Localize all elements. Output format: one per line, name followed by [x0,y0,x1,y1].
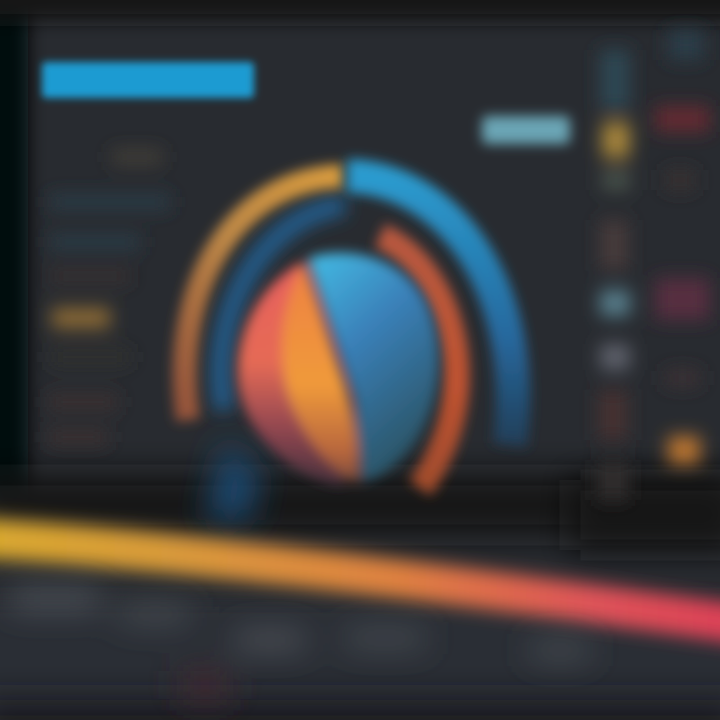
arc: red-orange [380,236,457,488]
bottom faint text blocks [10,590,590,700]
arc: inner blue [221,205,345,410]
ball stand [205,440,260,520]
left column of faint list items [48,150,170,444]
donut arcs [185,176,513,488]
orange slice [282,262,359,484]
yellow-to-red stripe [0,518,720,644]
blue half [308,253,439,482]
small label pill [482,116,570,144]
title bar [42,62,254,98]
pie ball [238,253,439,486]
arc: outer blue [347,176,513,445]
coral slice [238,262,345,486]
arc: orange [185,176,343,420]
right legend columns [598,30,710,500]
